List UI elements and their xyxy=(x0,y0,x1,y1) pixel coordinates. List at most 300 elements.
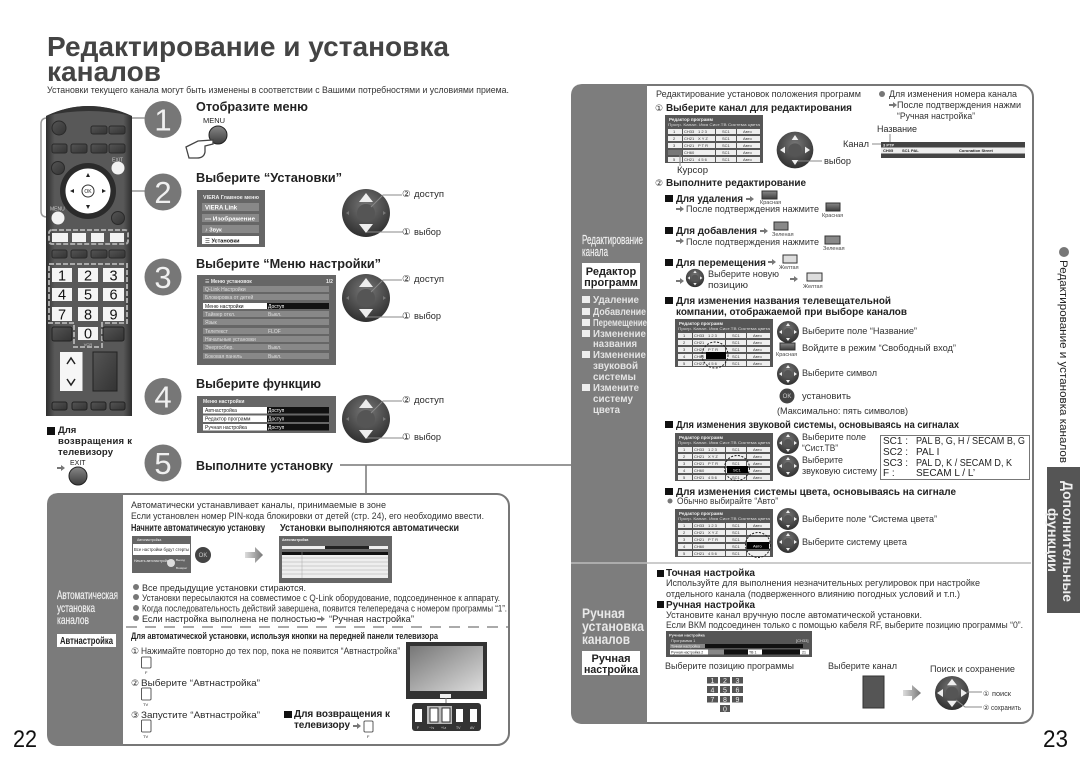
front panel step 3: Запустите “Автнастройка” xyxy=(141,710,260,721)
labels step 2 xyxy=(402,189,444,238)
program editor table: colour: Редактор программ xyxy=(679,511,724,516)
program editor table: sound: Прогр. Канал. Имя Сист.ТВ Система цвета xyxy=(678,440,771,445)
arrow xyxy=(903,685,921,701)
colour system steps: Выберите систему цвета xyxy=(802,537,907,547)
OK pad step 4 xyxy=(342,395,403,443)
main menu screenshot: VIERA Link xyxy=(205,206,238,212)
manual tuning screen: [CH33] xyxy=(796,638,808,643)
number keypad: 6 xyxy=(736,688,740,694)
TV illustration xyxy=(406,642,487,703)
program editor table: name: SC1 xyxy=(732,340,741,345)
remote number keys: 6 xyxy=(109,288,118,304)
section label: manual tuning: Ручная xyxy=(582,605,625,621)
add instructions: Зеленая xyxy=(772,232,794,238)
program editor table: cursor xyxy=(665,115,763,163)
return to TV note: телевизору xyxy=(58,447,114,458)
setup menu screenshot: FLOF xyxy=(268,329,281,335)
search and save: Поиск и сохранение xyxy=(930,664,1015,674)
remote EXIT button xyxy=(112,158,124,174)
menu button with hand icon xyxy=(186,118,227,158)
program editor table: colour: CH60 xyxy=(694,544,705,549)
section tab: additional functions: функции xyxy=(1045,508,1061,572)
program editor table: colour: 3 xyxy=(683,537,686,542)
start screen: Автонастройка xyxy=(137,538,161,542)
cursor label xyxy=(677,155,708,176)
choose channel xyxy=(828,661,897,708)
program editor table: name: Авто xyxy=(753,354,762,359)
arrow xyxy=(245,547,263,563)
heading: step 2: Выберите “Установки” xyxy=(196,170,342,185)
search and save: поиск xyxy=(992,691,1012,698)
program editor table: colour: Прогр. Канал. Имя Сист.ТВ Система цвета xyxy=(678,516,771,521)
number keypad: 9 xyxy=(736,697,740,704)
program editor table: name: SC1 xyxy=(732,347,741,352)
progress screen xyxy=(279,536,392,583)
step 2 heading: Выполните редактирование xyxy=(666,178,806,189)
name change steps: Войдите в режим “Свободный вход” xyxy=(802,343,956,353)
program editor table: name: 3 xyxy=(683,347,686,352)
move instructions: позицию xyxy=(708,280,748,290)
remote number keys: 0 xyxy=(84,326,92,342)
program editor table: colour: 5 xyxy=(683,551,686,556)
auto setup step headings: Начните автоматическую установку xyxy=(131,523,265,534)
program editor table: sound: 5 xyxy=(683,475,686,480)
sound system table: SECAM L / L’ xyxy=(916,468,975,479)
program editor table: name: SC1 xyxy=(732,354,741,359)
program editor table: colour: 1 xyxy=(683,523,686,528)
return to TV note xyxy=(284,709,391,739)
function menu screenshot: Доступ xyxy=(268,408,285,414)
program editor table: cursor: CH33 xyxy=(684,129,695,134)
step 2 heading: ② xyxy=(655,178,663,188)
main menu screenshot xyxy=(197,190,265,247)
dashed divider xyxy=(126,626,508,628)
main menu screenshot: ▭ Изображение xyxy=(205,216,255,222)
program editor table: name: Авто xyxy=(753,347,762,352)
program editor table: sound: SC1 xyxy=(732,447,741,452)
setup menu screenshot: 1/2 xyxy=(326,279,333,285)
labels step 4: доступ xyxy=(414,395,444,406)
program editor table: cursor: SC1 xyxy=(722,136,731,141)
auto setup bullets: Установки пересылаются на совместимое с Q-Link оборудование, подсоединенное к аппарату. xyxy=(142,593,500,603)
setup menu screenshot: Q-Link Настройки xyxy=(205,286,246,293)
setup menu screenshot: Выкл. xyxy=(268,312,281,318)
auto setup intro xyxy=(131,500,484,521)
OK pad step 2 xyxy=(342,189,403,237)
program editor table: name: 4 5 6 xyxy=(708,361,718,366)
remote channel keys xyxy=(60,352,117,391)
section label: channel editor: канала xyxy=(582,244,608,259)
section options list: Изменение xyxy=(593,349,646,361)
program editor table: colour: CH21 xyxy=(694,537,705,542)
number keypad xyxy=(707,677,743,714)
name change steps: Выберите символ xyxy=(802,368,877,378)
step 1 heading: Выберите канал для редактирования xyxy=(666,102,852,114)
title: Редактирование и установка xyxy=(47,31,449,62)
note: changing channel number xyxy=(879,89,1021,121)
program editor table: sound: Авто xyxy=(753,447,762,452)
setup menu screenshot: Блокировка от детей xyxy=(205,294,254,301)
manual tuning screen: Программа 1 xyxy=(671,638,696,643)
program editor table: colour: 4 xyxy=(683,544,686,549)
program editor table: sound xyxy=(675,433,773,481)
channel banner: Coronation Street xyxy=(959,148,993,153)
program editor table: colour: 2 xyxy=(683,530,686,535)
return to TV note: возвращения к xyxy=(58,436,132,447)
add instructions: Для добавления xyxy=(676,225,757,237)
name change heading: компании, отображаемой при выборе каналов xyxy=(676,306,907,318)
labels step 3: ② xyxy=(402,274,411,285)
vertical page label: Редактирование и установка каналов xyxy=(1057,260,1069,463)
front panel step 2: Выберите “Автнастройка” xyxy=(141,678,260,689)
colour system heading: Обычно выбирайте “Авто” xyxy=(677,496,778,506)
section options list: Перемещение xyxy=(593,317,647,329)
front panel step 3: TV xyxy=(143,734,148,739)
remote number keys: VCR xyxy=(84,342,92,347)
section tab: additional functions xyxy=(1045,467,1080,613)
fine tuning note: отдельного канала (подверженного влиянию погодных условий и т.п.) xyxy=(666,589,960,599)
start screen: Все настройки будут стерты xyxy=(134,546,189,552)
channel banner: 3 PTP xyxy=(883,142,894,148)
OK button xyxy=(195,547,211,563)
labels step 4 xyxy=(402,395,444,443)
section options list: звуковой xyxy=(593,360,638,372)
TV control panel: +/∧ xyxy=(441,726,447,730)
section label: channel editor: Редактор xyxy=(586,266,637,278)
manual tuning screen: Точная настройка xyxy=(671,644,700,648)
labels step 4: ① xyxy=(402,432,411,443)
program editor table: sound: 4 5 6 xyxy=(708,475,718,480)
subtitle: Установки текущего канала могут быть изменены в соответствии с Вашими потребностями и условиями приема. xyxy=(47,85,509,95)
program editor table: cursor: SC1 xyxy=(722,150,731,155)
number keypad: 3 xyxy=(736,678,740,685)
manual tuning screen xyxy=(666,631,812,657)
select pad: выбор xyxy=(824,156,851,167)
program editor table: sound: CH21 xyxy=(694,461,705,466)
remote navigation pad xyxy=(60,163,116,219)
program editor table: cursor: Авто xyxy=(743,136,752,141)
program editor table: sound: CH33 xyxy=(694,447,705,452)
TV control panel: −/∨ xyxy=(429,726,435,730)
TV control panel xyxy=(412,703,481,731)
name change steps: Красная xyxy=(776,352,797,358)
remote number keys: 2 xyxy=(84,268,92,284)
search and save: ① xyxy=(983,690,989,698)
return to TV note: телевизору xyxy=(294,720,350,731)
main menu screenshot: ♪ Звук xyxy=(205,228,222,234)
program editor table: cursor: 1 2 3 xyxy=(698,129,708,134)
auto setup bullets: Все предыдущие установки стираются. xyxy=(142,583,306,594)
program editor table: name: Авто xyxy=(753,340,762,345)
program editor table: name: CH60 xyxy=(694,354,705,359)
program editor table: sound: X Y Z xyxy=(708,454,718,459)
return to TV note: Для возвращения к xyxy=(294,709,391,720)
program editor table: cursor: Авто xyxy=(743,129,752,134)
step number 3 xyxy=(144,258,182,296)
section options list xyxy=(582,294,647,416)
name change steps xyxy=(776,321,956,416)
program editor table: colour: X Y Z xyxy=(708,530,718,535)
add instructions: После подтверждения нажмите xyxy=(686,237,819,247)
fine tuning note xyxy=(657,568,980,599)
program editor table: name: 2 xyxy=(683,340,686,345)
program editor table: name: SC1 xyxy=(732,361,741,366)
move instructions xyxy=(665,255,823,290)
section options list: цвета xyxy=(593,404,620,416)
remote MENU button xyxy=(50,206,65,224)
name label: Название xyxy=(877,124,917,135)
title xyxy=(47,31,449,87)
step number 1 xyxy=(144,101,182,138)
sidebar: auto setup: Автоматическая xyxy=(57,588,118,602)
channel label xyxy=(843,139,882,150)
program editor table: colour: CH21 xyxy=(694,551,705,556)
step number 1: 1 xyxy=(154,102,172,138)
remote number keys: 4 xyxy=(58,288,66,304)
sound system steps: “Сист.ТВ” xyxy=(802,443,838,453)
channel label: Канал xyxy=(843,139,869,150)
program editor table: sound: SC1 xyxy=(732,461,741,466)
program editor table: name: Редактор программ xyxy=(679,321,724,326)
sound system heading: Для изменения звуковой системы, основываясь на сигналах xyxy=(676,420,959,431)
step number 4: 4 xyxy=(154,380,172,414)
front panel step 3: ③ xyxy=(131,710,139,720)
panel: channel editing xyxy=(571,84,1033,724)
manual tuning note: Ручная настройка xyxy=(666,600,755,611)
step number 4 xyxy=(144,378,182,415)
remote number keys: 9 xyxy=(109,308,118,324)
heading: step 5: Выполните установку xyxy=(196,458,334,473)
setup menu screenshot xyxy=(197,275,336,365)
program editor table: cursor: P T R xyxy=(698,143,708,148)
move instructions: Для перемещения xyxy=(676,258,766,269)
delete instructions: Красная xyxy=(822,213,843,219)
program editor table: name: Прогр. Канал. Имя Сист.ТВ Система цвета xyxy=(678,326,771,331)
number keypad: 7 xyxy=(711,697,715,704)
section options list: названия xyxy=(593,338,637,350)
remote top buttons xyxy=(52,121,125,258)
labels step 3 xyxy=(402,274,444,322)
heading: step 1: Отобразите меню xyxy=(196,99,308,114)
sound system steps: Выберите xyxy=(802,455,843,465)
labels step 3: доступ xyxy=(414,274,444,285)
name change steps: Выберите поле “Название” xyxy=(802,326,917,336)
choose program position xyxy=(665,661,794,714)
program editor table: colour: SC1 xyxy=(732,530,741,535)
program editor table: cursor: SC1 xyxy=(722,157,731,162)
program editor table: cursor: CH21 xyxy=(684,143,695,148)
front panel step 2 xyxy=(131,678,260,707)
manual tuning screen: TB 1 xyxy=(749,650,756,654)
TV control panel: F xyxy=(417,726,419,730)
progress screen: Автонастройка xyxy=(282,538,308,542)
labels step 3: ① xyxy=(402,311,411,322)
manual tuning screen: 21 xyxy=(802,650,806,654)
front panel step 1: Нажимайте повторно до тех пор, пока не появится “Автнастройка” xyxy=(141,646,400,656)
front panel step 2: TV xyxy=(143,702,148,707)
add instructions xyxy=(665,222,845,252)
name change heading xyxy=(665,296,907,318)
program editor table: name: SC1 xyxy=(732,333,741,338)
sound system table xyxy=(880,436,1030,480)
auto setup intro: Если установлен номер PIN-кода блокировки от детей (стр. 24), его необходимо ввести. xyxy=(131,511,484,521)
program editor table: colour: P T R xyxy=(708,537,718,542)
delete instructions: Красная xyxy=(760,200,781,206)
sound system table: F : xyxy=(883,468,895,479)
number keypad: 2 xyxy=(723,678,727,685)
setup menu screenshot: Боковая панель xyxy=(205,354,242,360)
program editor table: name: CH21 xyxy=(694,361,705,366)
connector lines from remote to step circles xyxy=(41,118,146,217)
program editor table: cursor: 2 xyxy=(673,136,676,141)
section options list: систему xyxy=(593,393,633,405)
search and save: сохранить xyxy=(991,705,1021,712)
labels step 4: выбор xyxy=(414,432,441,443)
program editor table: cursor: 4 5 6 xyxy=(698,157,708,162)
remote number keys: 5 xyxy=(84,288,92,304)
program editor table: colour: Авто xyxy=(753,523,762,528)
program editor table: colour xyxy=(675,509,773,558)
labels step 2: выбор xyxy=(414,227,441,238)
note: changing channel number: Для изменения номера канала xyxy=(889,89,1017,99)
auto setup bullets: Когда последовательность действий завершена, появится телепередача с номером программы “1”. xyxy=(142,604,507,614)
program editor table: sound: CH60 xyxy=(694,468,705,473)
step number 2: 2 xyxy=(154,175,172,210)
name change steps: установить xyxy=(802,391,851,401)
program editor table: cursor: 3 xyxy=(673,143,676,148)
function menu screenshot: Редактор программ xyxy=(205,416,251,422)
program editor table: cursor: 5 xyxy=(673,157,676,162)
labels step 2: доступ xyxy=(414,189,444,200)
sidebar: auto setup xyxy=(47,493,123,746)
front panel step 3 xyxy=(131,710,260,739)
remote number keys: 1 xyxy=(58,268,66,284)
front panel step 1 xyxy=(131,646,400,675)
program editor table: name: CH21 xyxy=(694,347,705,352)
front panel heading: Для автоматической установки, используя кнопки на передней панели телевизора xyxy=(131,631,439,642)
delete instructions: Для удаления xyxy=(676,194,743,205)
setup menu screenshot: ☰ Меню установок xyxy=(205,279,252,285)
remote number keys: 8 xyxy=(84,308,92,324)
channel banner: PAL xyxy=(911,148,919,153)
front panel step 2: ② xyxy=(131,678,139,688)
remote number keys: 7 xyxy=(58,308,66,324)
sound system table: SC1 : xyxy=(883,436,908,447)
program editor table: sound: SC1 xyxy=(732,475,741,480)
remote bottom keys xyxy=(52,402,125,410)
program editor table: sound: SC1 xyxy=(733,468,742,472)
note: changing channel number: После подтверждения нажми xyxy=(897,100,1021,110)
note: changing channel number: “Ручная настройка” xyxy=(897,111,975,121)
sound system table: PAL D, K / SECAM D, K xyxy=(916,458,1012,469)
program editor table: name: 1 xyxy=(683,333,686,338)
step number 5 xyxy=(144,444,182,482)
step number 2 xyxy=(144,174,182,210)
labels step 4: ② xyxy=(402,395,411,406)
TV control panel: AV xyxy=(470,726,475,730)
heading: step 3: Выберите “Меню настройки” xyxy=(196,256,381,271)
program editor table: colour: 1 2 3 xyxy=(708,523,718,528)
program editor table: cursor: SC1 xyxy=(722,129,731,134)
front panel step 1: F xyxy=(145,670,148,675)
manual tuning note: Если ВКМ подсоединен только с помощью кабеля RF, выберите позицию программы “0”. xyxy=(666,620,1023,630)
program editor table: sound: 1 2 3 xyxy=(708,447,718,452)
start screen: Выход xyxy=(176,558,185,562)
setup menu screenshot: Меню настройки xyxy=(205,303,244,310)
name change steps: (Максимально: пять символов) xyxy=(777,406,908,416)
section label: manual tuning: установка xyxy=(582,618,644,634)
setup menu screenshot: Телетекст xyxy=(205,329,229,335)
return to TV note: EXIT xyxy=(70,460,86,467)
auto setup bullets: “Ручная настройка” xyxy=(329,614,414,625)
labels step 2: ② xyxy=(402,189,411,200)
function menu screenshot: Автнастройка xyxy=(205,407,237,414)
program editor table: name: 1 2 3 xyxy=(708,333,718,338)
colour system heading xyxy=(665,487,956,506)
choose program position: Выберите позицию программы xyxy=(665,661,794,671)
main menu screenshot: ☰ Установки xyxy=(205,238,240,244)
front panel step 1: ① xyxy=(131,646,139,656)
cursor label: Курсор xyxy=(677,165,708,176)
program editor table: cursor: SC1 xyxy=(722,143,731,148)
page number 23: 23 xyxy=(1043,726,1068,753)
move instructions: Выберите новую xyxy=(708,269,779,279)
program editor table: colour: SC1 xyxy=(732,544,741,549)
setup menu screenshot: Язык xyxy=(205,320,217,326)
program editor table: sound: 1 xyxy=(683,447,686,452)
menu button with hand icon: MENU xyxy=(203,118,225,125)
remote MENU button: MENU xyxy=(50,206,65,212)
sound system steps xyxy=(777,432,877,477)
connector from step 5 to panels xyxy=(340,465,571,493)
setup menu screenshot: Доступ xyxy=(268,304,285,310)
sound system table: PAL B, G, H / SECAM B, G xyxy=(916,436,1025,447)
name change steps: OK xyxy=(783,394,791,400)
program editor table: sound: Авто xyxy=(753,461,762,466)
program editor table: sound: Авто xyxy=(753,454,762,459)
start screen: Начать автонастройку xyxy=(134,559,170,563)
labels step 3: выбор xyxy=(414,311,441,322)
remote control xyxy=(46,106,132,416)
step number 3: 3 xyxy=(154,260,172,295)
program editor table: sound: P T R xyxy=(708,461,718,466)
panel: auto setup xyxy=(47,493,509,746)
sound system table: PAL I xyxy=(916,447,939,458)
name label xyxy=(877,124,917,143)
fine tuning note: Точная настройка xyxy=(666,568,755,579)
function menu screenshot: Доступ xyxy=(268,416,285,422)
sidebar: auto setup: каналов xyxy=(57,613,89,627)
choose channel: Выберите канал xyxy=(828,661,897,671)
program editor table: cursor: Авто xyxy=(743,157,752,162)
channel banner: SC1 xyxy=(902,148,911,153)
section label: manual tuning: настройка xyxy=(584,664,639,676)
section label: channel editor: программ xyxy=(584,277,638,289)
section tab: additional functions: Дополнительные xyxy=(1060,481,1076,602)
setup menu screenshot: Выкл. xyxy=(268,354,281,360)
remote number keys xyxy=(49,264,127,347)
delete instructions: После подтверждения нажмите xyxy=(686,204,819,214)
program editor table: name: 5 xyxy=(683,361,686,366)
function menu screenshot: Ручная настройка xyxy=(205,424,247,431)
program editor table: colour: CH33 xyxy=(694,523,705,528)
program editor table: cursor: CH21 xyxy=(684,136,695,141)
manual tuning screen: Ручная настройка 2 xyxy=(671,650,703,654)
intro text: Редактирование установок положения программ xyxy=(656,89,861,99)
title: каналов xyxy=(47,56,161,87)
number keypad: 0 xyxy=(723,706,727,714)
manual tuning note: Установите канал вручную после автоматической установки. xyxy=(666,610,922,620)
